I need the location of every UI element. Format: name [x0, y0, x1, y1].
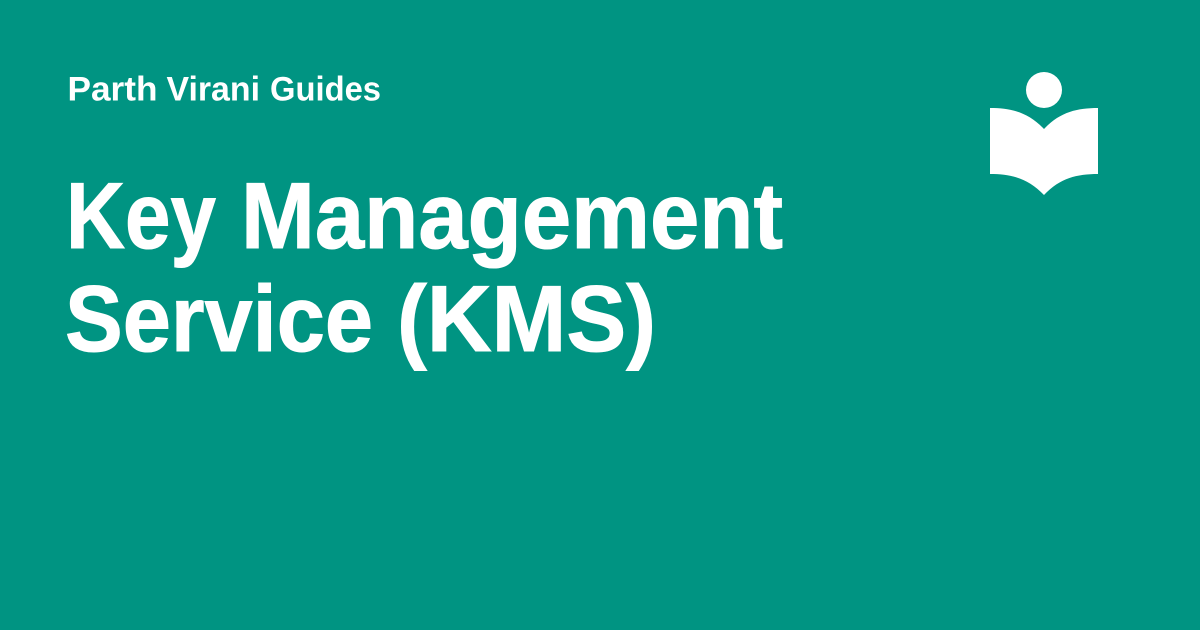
title: (KMS) [397, 266, 656, 371]
title [65, 163, 783, 371]
title: Key [66, 163, 216, 268]
site name [68, 70, 381, 108]
site name: Guides [270, 70, 381, 108]
icon: reader with open book [990, 72, 1098, 195]
site name: Parth [68, 70, 158, 108]
title: Management [241, 163, 783, 268]
site name: Virani [166, 70, 260, 108]
title: Service [65, 266, 373, 371]
